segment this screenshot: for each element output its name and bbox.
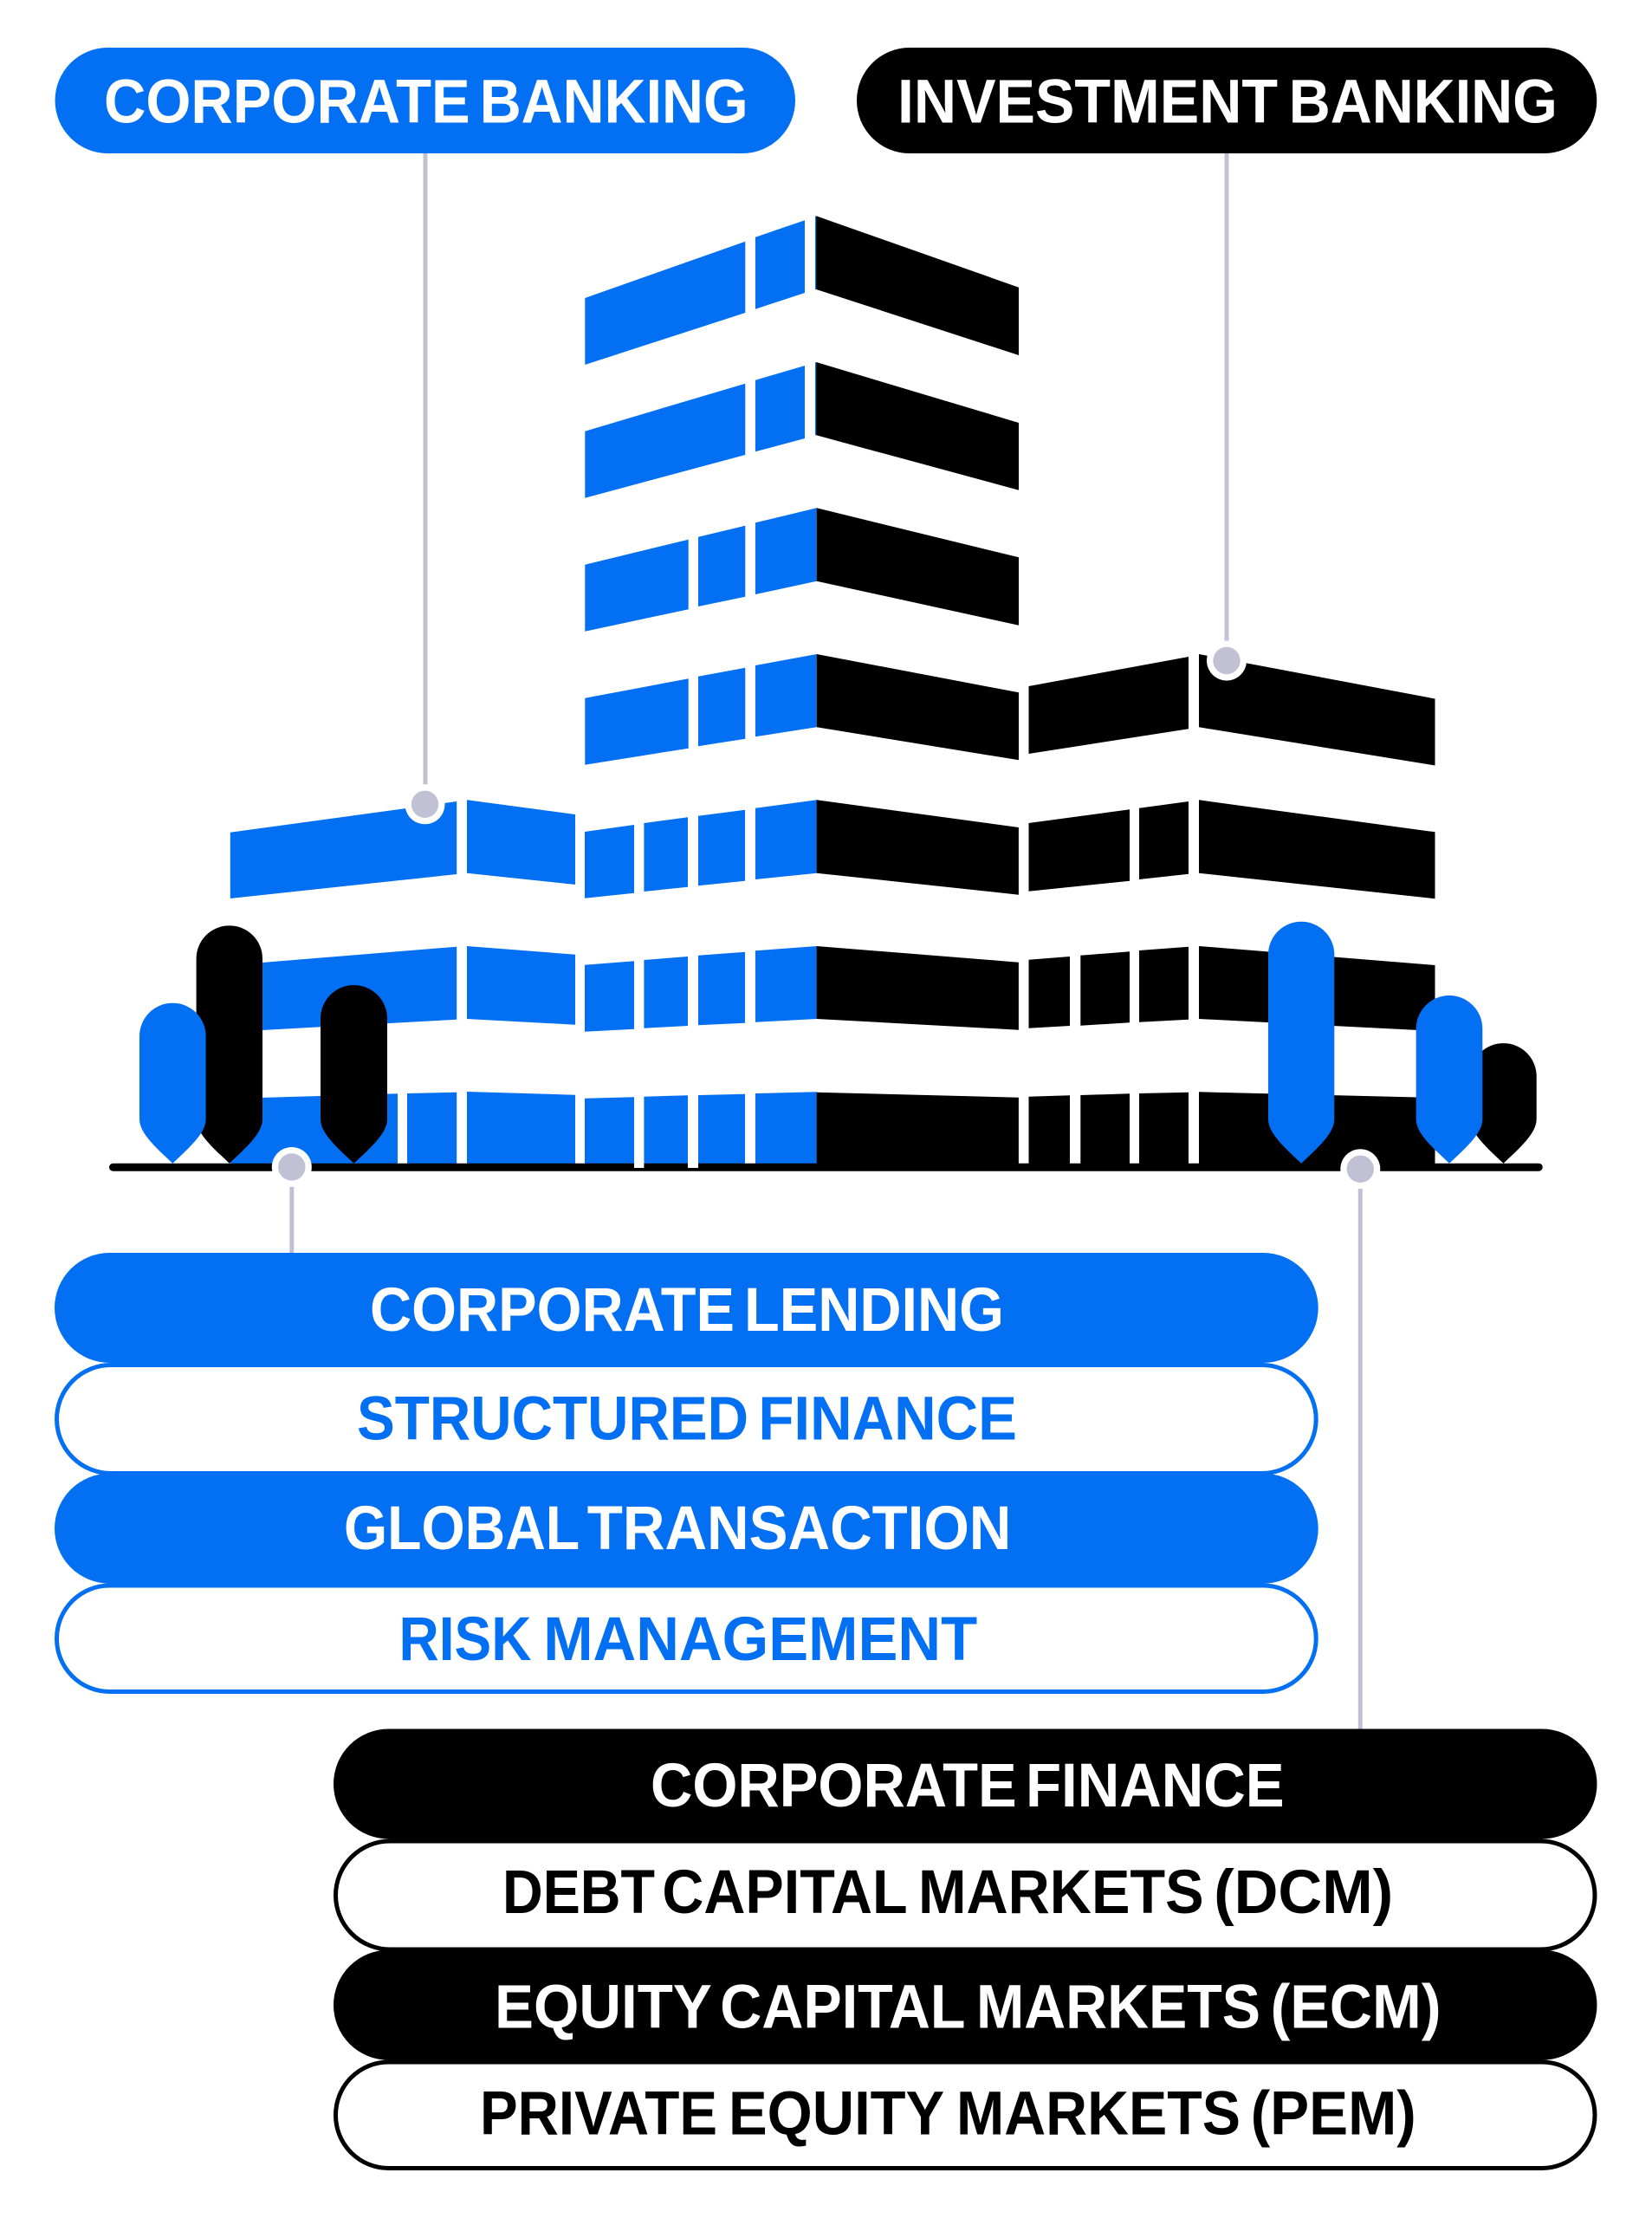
- item outlined: private equity markets: (PEM): [1251, 2079, 1416, 2149]
- floor 5: [230, 800, 1435, 898]
- item outlined: structured finance: FINANCE: [758, 1385, 1017, 1454]
- item outlined: risk management: MANAGEMENT: [543, 1605, 977, 1674]
- item filled: corporate lending: LENDING: [744, 1276, 1004, 1345]
- marker dot: investment banking services: [1340, 1149, 1380, 1189]
- heading pill: investment banking: BANKING: [1289, 68, 1558, 137]
- floor 1: [585, 216, 1019, 365]
- item outlined: debt capital markets: (DCM): [1214, 1858, 1393, 1927]
- item filled: global transaction: [55, 1474, 1318, 1584]
- item outlined: private equity markets: EQUITY: [729, 2079, 944, 2149]
- item outlined: debt capital markets: DEBT: [502, 1858, 655, 1927]
- item filled: corporate finance: [334, 1729, 1597, 1839]
- list: corporate banking services: [55, 1253, 1318, 1691]
- building illustration: [230, 216, 1435, 1165]
- item outlined: private equity markets: PRIVATE: [480, 2079, 717, 2149]
- tree: blue tall right: [1268, 922, 1334, 1164]
- tree: black tall left: [197, 925, 262, 1164]
- heading pill: corporate banking: [55, 48, 795, 153]
- item filled: corporate finance: FINANCE: [1026, 1752, 1285, 1820]
- item outlined: risk management: RISK: [398, 1605, 532, 1674]
- item outlined: debt capital markets: [336, 1841, 1595, 1949]
- item outlined: private equity markets: [336, 2062, 1595, 2168]
- connector line: investment services: [1358, 1189, 1363, 1731]
- item outlined: structured finance: STRUCTURED: [357, 1385, 748, 1454]
- item outlined: private equity markets: MARKETS: [956, 2079, 1241, 2149]
- heading pill: corporate banking: CORPORATE: [104, 68, 470, 137]
- tree: blue left: [139, 1003, 206, 1164]
- item outlined: risk management: [57, 1586, 1316, 1691]
- heading pill: investment banking: [857, 48, 1597, 153]
- item outlined: debt capital markets: MARKETS: [918, 1858, 1204, 1927]
- item outlined: debt capital markets: CAPITAL: [662, 1858, 906, 1927]
- item filled: corporate lending: [55, 1253, 1318, 1363]
- item filled: equity capital markets: [334, 1950, 1597, 2060]
- tree: black far right: [1470, 1043, 1537, 1164]
- marker dot: corporate banking services: [272, 1147, 312, 1187]
- tree: black second left: [321, 985, 387, 1164]
- item filled: equity capital markets: CAPITAL: [720, 1974, 964, 2041]
- item filled: equity capital markets: MARKETS: [976, 1974, 1260, 2041]
- tree: blue right: [1416, 996, 1482, 1164]
- marker dot: investment banking: [1207, 641, 1247, 681]
- heading pill: corporate banking: BANKING: [480, 68, 748, 137]
- item filled: global transaction: TRANSACTION: [587, 1495, 1011, 1563]
- item filled: corporate lending: CORPORATE: [370, 1276, 735, 1345]
- marker dot: corporate banking: [405, 784, 445, 824]
- item filled: global transaction: GLOBAL: [344, 1495, 579, 1563]
- item filled: equity capital markets: (ECM): [1271, 1974, 1441, 2041]
- heading pill: investment banking: INVESTMENT: [897, 68, 1278, 137]
- floor 3: [585, 508, 1019, 632]
- floor 2: [585, 362, 1019, 498]
- floor 7: [230, 1092, 1435, 1165]
- item outlined: structured finance: [57, 1365, 1316, 1473]
- list: investment banking services: [334, 1729, 1597, 2168]
- item filled: equity capital markets: EQUITY: [495, 1974, 711, 2041]
- connector line: corporate services: [289, 1187, 294, 1254]
- ground line: [109, 1161, 1543, 1171]
- connector line: corporate banking to building: [423, 152, 428, 785]
- floor 4: [585, 654, 1435, 766]
- item filled: corporate finance: CORPORATE: [651, 1752, 1017, 1820]
- connector line: investment banking to building: [1225, 152, 1228, 643]
- floor 6: [230, 946, 1435, 1032]
